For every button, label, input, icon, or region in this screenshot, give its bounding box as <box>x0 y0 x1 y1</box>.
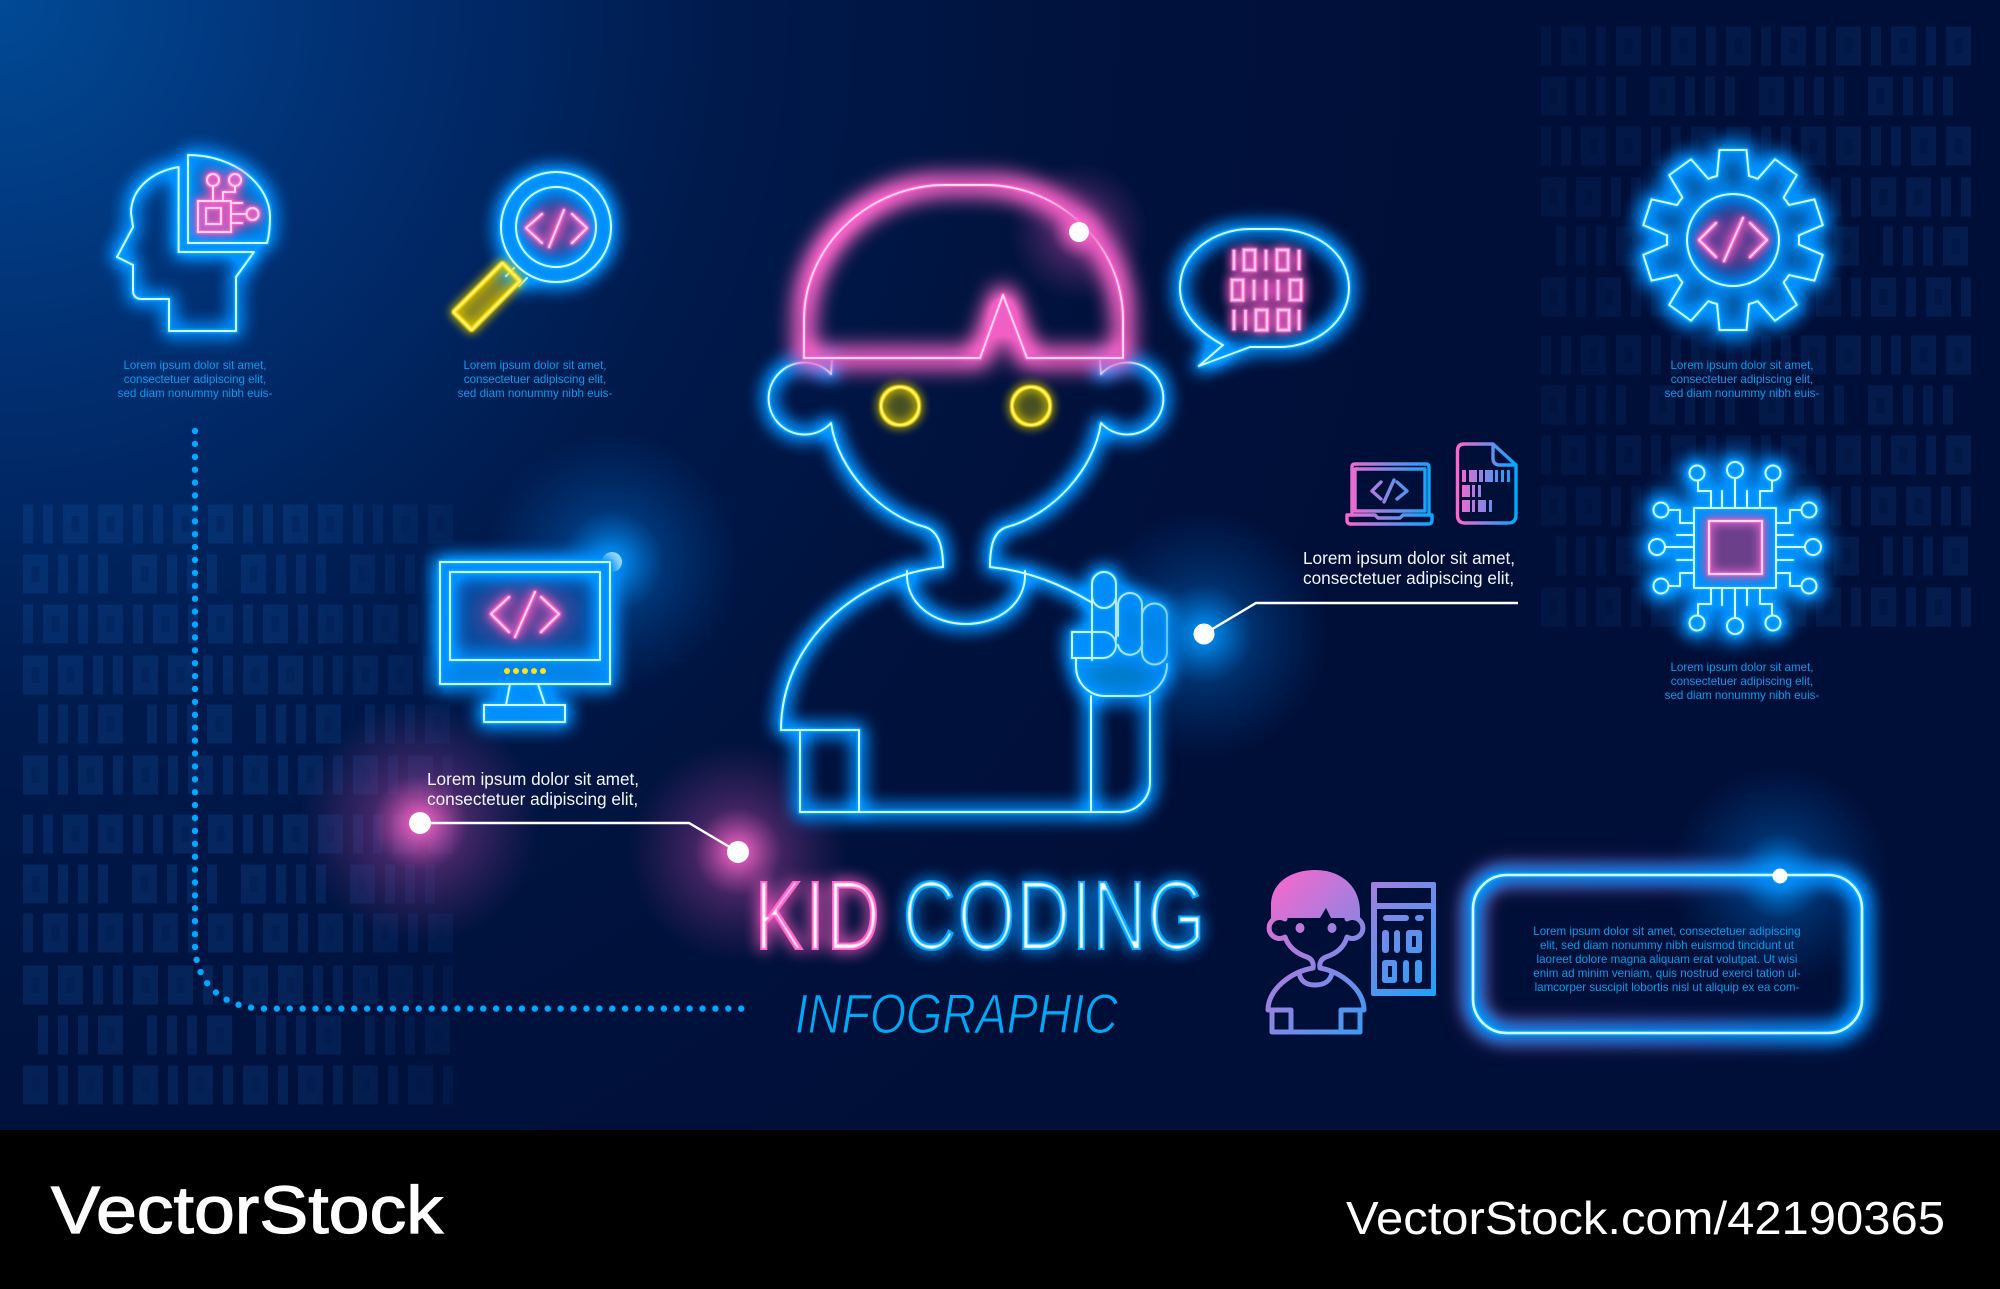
text: magnifier caption: consectetuer adipiscing elit, <box>464 373 606 386</box>
text: head caption: Lorem ipsum dolor sit amet, <box>123 359 267 372</box>
callout: right blue <box>1079 509 1518 759</box>
text: gear caption: Lorem ipsum dolor sit amet, <box>1670 359 1814 372</box>
icon: head with circuit <box>117 155 270 331</box>
icon: binary file <box>1458 444 1516 523</box>
eyes <box>881 387 1050 425</box>
text: head caption <box>118 359 272 400</box>
icon: magnifier <box>454 172 611 330</box>
text: head caption: sed diam nonummy nibh euis- <box>118 387 272 400</box>
callout: right blue: Lorem ipsum dolor sit amet, <box>1303 548 1515 568</box>
text: chip caption <box>1665 661 1819 702</box>
icon: microchip <box>1623 435 1847 659</box>
binary pattern: bottom left <box>23 524 453 1085</box>
callout: right blue: consectetuer adipiscing elit, <box>1303 568 1514 588</box>
text: gear caption <box>1665 359 1819 400</box>
title: KID CODING: KID <box>754 860 881 971</box>
icon: gear <box>1618 125 1848 355</box>
text: chip caption: consectetuer adipiscing elit, <box>1671 675 1813 688</box>
text: chip caption: Lorem ipsum dolor sit amet, <box>1670 661 1814 674</box>
subtitle: INFOGRAPHIC: INFOGRAPHIC <box>795 982 1119 1045</box>
text frame: laoreet dolore magna aliquam erat volutpat. Ut wisi <box>1536 953 1798 966</box>
title: KID CODING: CODING <box>902 860 1206 971</box>
footer bar <box>0 1130 2000 1289</box>
text: magnifier caption <box>458 359 612 400</box>
text: magnifier caption: sed diam nonummy nibh euis- <box>458 387 612 400</box>
speech bubble <box>1180 229 1349 366</box>
dotted connector <box>195 431 742 1009</box>
callout: left pink: consectetuer adipiscing elit, <box>427 789 638 809</box>
kid figure <box>769 162 1167 812</box>
text: chip caption: sed diam nonummy nibh euis- <box>1665 689 1819 702</box>
icon: laptop <box>1347 464 1432 524</box>
callout: left pink: Lorem ipsum dolor sit amet, <box>427 769 639 789</box>
text frame: lamcorper suscipit lobortis nisl ut aliquip ex ea com- <box>1535 981 1800 994</box>
text: gear caption: consectetuer adipiscing elit, <box>1671 373 1813 386</box>
hair sparkle <box>1009 162 1149 302</box>
title: KID CODING <box>754 860 1206 971</box>
icon: small kid <box>1268 870 1364 1032</box>
binary pattern: top right <box>1541 46 1975 607</box>
text frame: enim ad minim veniam, quis nostrud exerci tation ul- <box>1533 967 1801 980</box>
body outline <box>769 359 1167 812</box>
text: head caption: consectetuer adipiscing elit, <box>124 373 266 386</box>
footer bar: VectorStock <box>51 1173 444 1248</box>
callout: left pink <box>300 703 848 962</box>
hair <box>804 185 1123 358</box>
text: gear caption: sed diam nonummy nibh euis- <box>1665 387 1819 400</box>
hand fill <box>1076 572 1167 696</box>
text: magnifier caption: Lorem ipsum dolor sit amet, <box>463 359 607 372</box>
text frame: Lorem ipsum dolor sit amet, consectetuer adipiscing <box>1533 925 1801 938</box>
icon: monitor <box>440 432 742 722</box>
icon: code panel <box>1371 882 1436 996</box>
footer bar: VectorStock.com/42190365 <box>1346 1192 1945 1244</box>
text frame <box>1473 766 1890 1033</box>
text frame: elit, sed diam nonummy nibh euismod tincidunt ut <box>1540 939 1795 952</box>
